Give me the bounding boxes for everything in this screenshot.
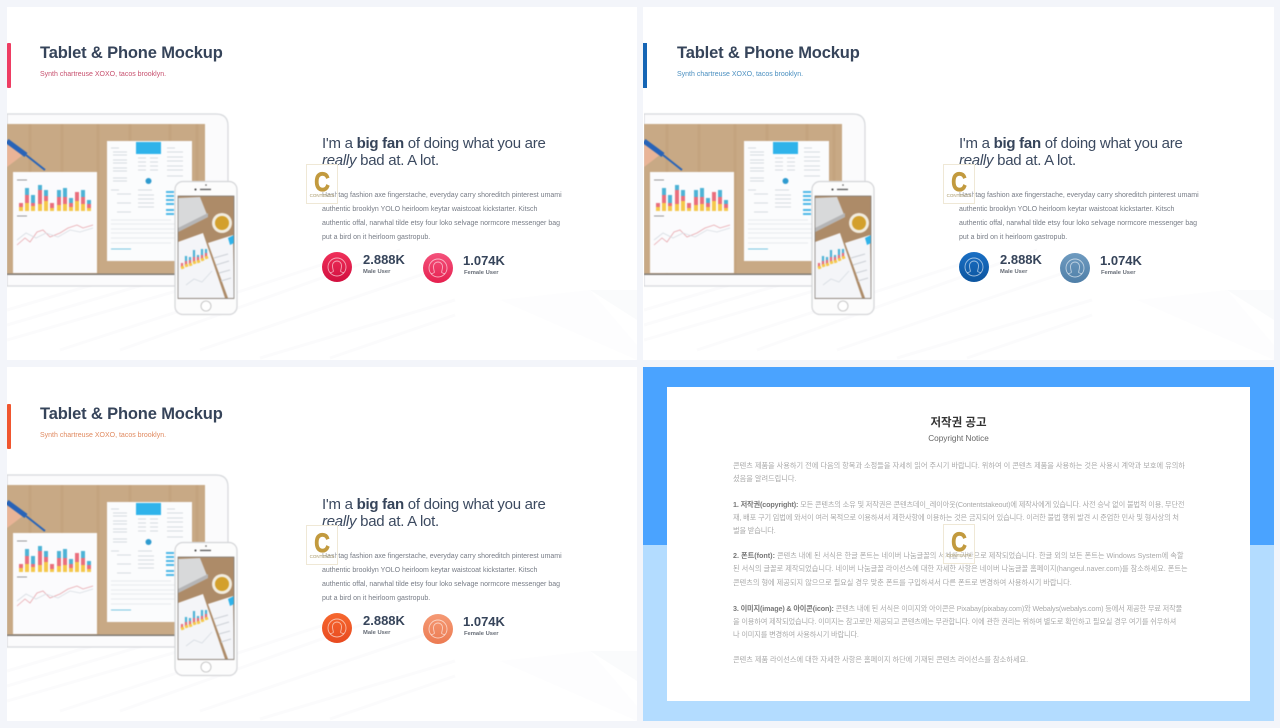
notice title: 저작권 공고	[930, 417, 987, 429]
body text	[322, 192, 562, 241]
body text: put a bird on it heirloom gastropub.	[322, 595, 430, 602]
section 2: 콘텐츠의 형에 제공되지 않으므로 필요실 경우 맞춘 폰트를 구입하셔서 다른 폰트로 변경하여 사용하시기 바랍니다.	[733, 578, 1072, 587]
device mockup: tablet and phone	[7, 404, 453, 677]
watermark: C	[314, 528, 330, 558]
accent bar	[643, 43, 647, 88]
stat: male users: 2.888K	[363, 613, 405, 628]
stat: female users: 1.074K	[463, 253, 505, 268]
headline: I'm a big fan of doing what you are	[322, 496, 546, 513]
subheading: Synth chartreuse XOXO, tacos brooklyn.	[40, 71, 166, 78]
section 3: 을 이용하여 제작되었습니다. 이미지는 참고로만 제공되고 콘텐츠에는 무관합니다. 이에 관한 권리는 위하여 별도로 확인하고 필요실 경우 여기를 쉬우하셔	[733, 617, 1176, 626]
body text	[959, 192, 1199, 241]
label: male user: Male User	[363, 630, 390, 636]
panel: slide 1 red mockup	[7, 7, 637, 360]
headline: I'm a big fan of doing what you are	[959, 135, 1183, 152]
body text: authentic brooklyn YOLO heirloom keytar waistcoat kickstarter. Kitsch	[322, 567, 537, 574]
label: female user: Female User	[464, 270, 498, 276]
section 1: 재, 배포 구기 임법에 와서이 여러 목적으로 이용하셔서 제한사항에 이용하는 것은 금지되어 있습니다. 이러한 불법 행위 발견 시 준엄한 민사 및 형사상의 처	[733, 513, 1179, 522]
device mockup: tablet and phone	[644, 113, 1090, 316]
watermark: CONTENTS	[947, 193, 971, 198]
device mockup: tablet and phone	[7, 43, 453, 316]
heading: Tablet & Phone Mockup	[40, 44, 223, 62]
body text: Hashtag fashion axe fingerstache, everyday carry shoreditch pinterest umami	[322, 552, 562, 560]
watermark	[306, 164, 338, 204]
panel: slide 3 orange mockup	[7, 367, 637, 721]
intro paragraph: 셨음을 알려드립니다.	[733, 474, 797, 483]
heading: Tablet & Phone Mockup	[40, 405, 223, 423]
headline: really bad at. A lot.	[322, 152, 439, 169]
watermark: C	[314, 167, 330, 197]
watermark: C	[951, 167, 967, 197]
label: female user: Female User	[464, 631, 498, 637]
stat: female users: 1.074K	[1100, 253, 1142, 268]
body text: authentic offal, narwhal tilde etsy four loko selvage normcore messenger bag	[959, 220, 1197, 227]
headline	[322, 135, 546, 169]
watermark	[943, 524, 975, 564]
body text: authentic brooklyn YOLO heirloom keytar waistcoat kickstarter. Kitsch	[959, 206, 1174, 213]
section 2	[733, 551, 1188, 587]
watermark: CONTENTS	[310, 193, 334, 198]
label: male user: Male User	[363, 269, 390, 275]
intro paragraph	[733, 461, 1185, 483]
body text: authentic offal, narwhal tilde etsy four loko selvage normcore messenger bag	[322, 220, 560, 227]
body text: put a bird on it heirloom gastropub.	[959, 234, 1067, 241]
panel: copyright notice	[643, 367, 1274, 721]
watermark: CONTENTS	[310, 554, 334, 559]
section 1: 벌을 받습니다.	[733, 526, 776, 535]
body text	[322, 552, 562, 602]
subheading: Synth chartreuse XOXO, tacos brooklyn.	[677, 71, 803, 78]
section 2: 된 서식의 글꼴로 제작되었습니다. 네이버 나눔글꼴 라이선스에 대한 자세한 사항은 네이버 나눔글꼴 홈페이지(hangeul.naver.com)를 참소하세요. 폰트는	[733, 564, 1188, 573]
section 3: 3. 이미지(image) & 아이콘(icon): 콘텐츠 내에 된 서식은 이미지와 아이콘은 Pixabay(pixabay.com)와 Webalys(webalys.com) 등에서 제공한 무료 저작물	[733, 604, 1182, 613]
headline: really bad at. A lot.	[959, 152, 1076, 169]
label: female user: Female User	[1101, 270, 1135, 276]
section 3: 나 이미지를 변경하여 사용하시기 바랍니다.	[733, 630, 859, 639]
panel: slide 2 blue mockup	[643, 7, 1274, 360]
stat: male users: 2.888K	[1000, 252, 1042, 267]
headline	[322, 496, 546, 530]
headline: I'm a big fan of doing what you are	[322, 135, 546, 152]
white notice card	[667, 387, 1250, 701]
body text: put a bird on it heirloom gastropub.	[322, 234, 430, 241]
section 3	[733, 604, 1182, 639]
watermark: C	[951, 527, 967, 557]
headline	[959, 135, 1183, 169]
subheading: Synth chartreuse XOXO, tacos brooklyn.	[40, 432, 166, 439]
watermark	[943, 164, 975, 204]
stat: male users: 2.888K	[363, 252, 405, 267]
label: male user: Male User	[1000, 269, 1027, 275]
stat: female users: 1.074K	[463, 614, 505, 629]
watermark	[306, 525, 338, 565]
headline: really bad at. A lot.	[322, 513, 439, 530]
closing line: 콘텐츠 제품 라이선스에 대한 자세한 사항은 홈페이지 하단에 기재된 콘텐츠 라이선스를 참소하세요.	[733, 655, 1028, 664]
intro paragraph: 콘텐츠 제품을 사용하기 전에 다음의 항목과 소정들을 자세히 읽어 주시기 바랍니다. 위하여 이 콘텐츠 제품을 사용하는 것은 사용시 계약과 보호에 유의하	[733, 461, 1185, 470]
section 1	[733, 500, 1184, 535]
blue top band	[643, 367, 1274, 545]
body text: authentic brooklyn YOLO heirloom keytar waistcoat kickstarter. Kitsch	[322, 206, 537, 213]
body text: authentic offal, narwhal tilde etsy four loko selvage normcore messenger bag	[322, 581, 560, 588]
watermark: CONTENTS	[947, 553, 971, 558]
notice subtitle: Copyright Notice	[928, 434, 989, 443]
body text: Hashtag fashion axe fingerstache, everyday carry shoreditch pinterest umami	[959, 192, 1199, 198]
section 2: 2. 폰트(font): 콘텐츠 내에 된 서식은 한글 폰트는 네이버 나눔글꼴의 서체를 기반으로 제작되었습니다. 한글 외의 보든 폰트는 Windows System에 속할	[733, 551, 1183, 560]
body text: Hashtag fashion axe fingerstache, everyday carry shoreditch pinterest umami	[322, 192, 562, 198]
heading: Tablet & Phone Mockup	[677, 44, 860, 62]
section 1: 1. 저작권(copyright): 모든 콘텐츠의 소유 및 저작권은 콘텐츠데이_레이아웃(Contentstakeout)에 제작사에게 있습니다. 사전 승낙 없이 불법적 이용, 무단전	[733, 500, 1184, 509]
